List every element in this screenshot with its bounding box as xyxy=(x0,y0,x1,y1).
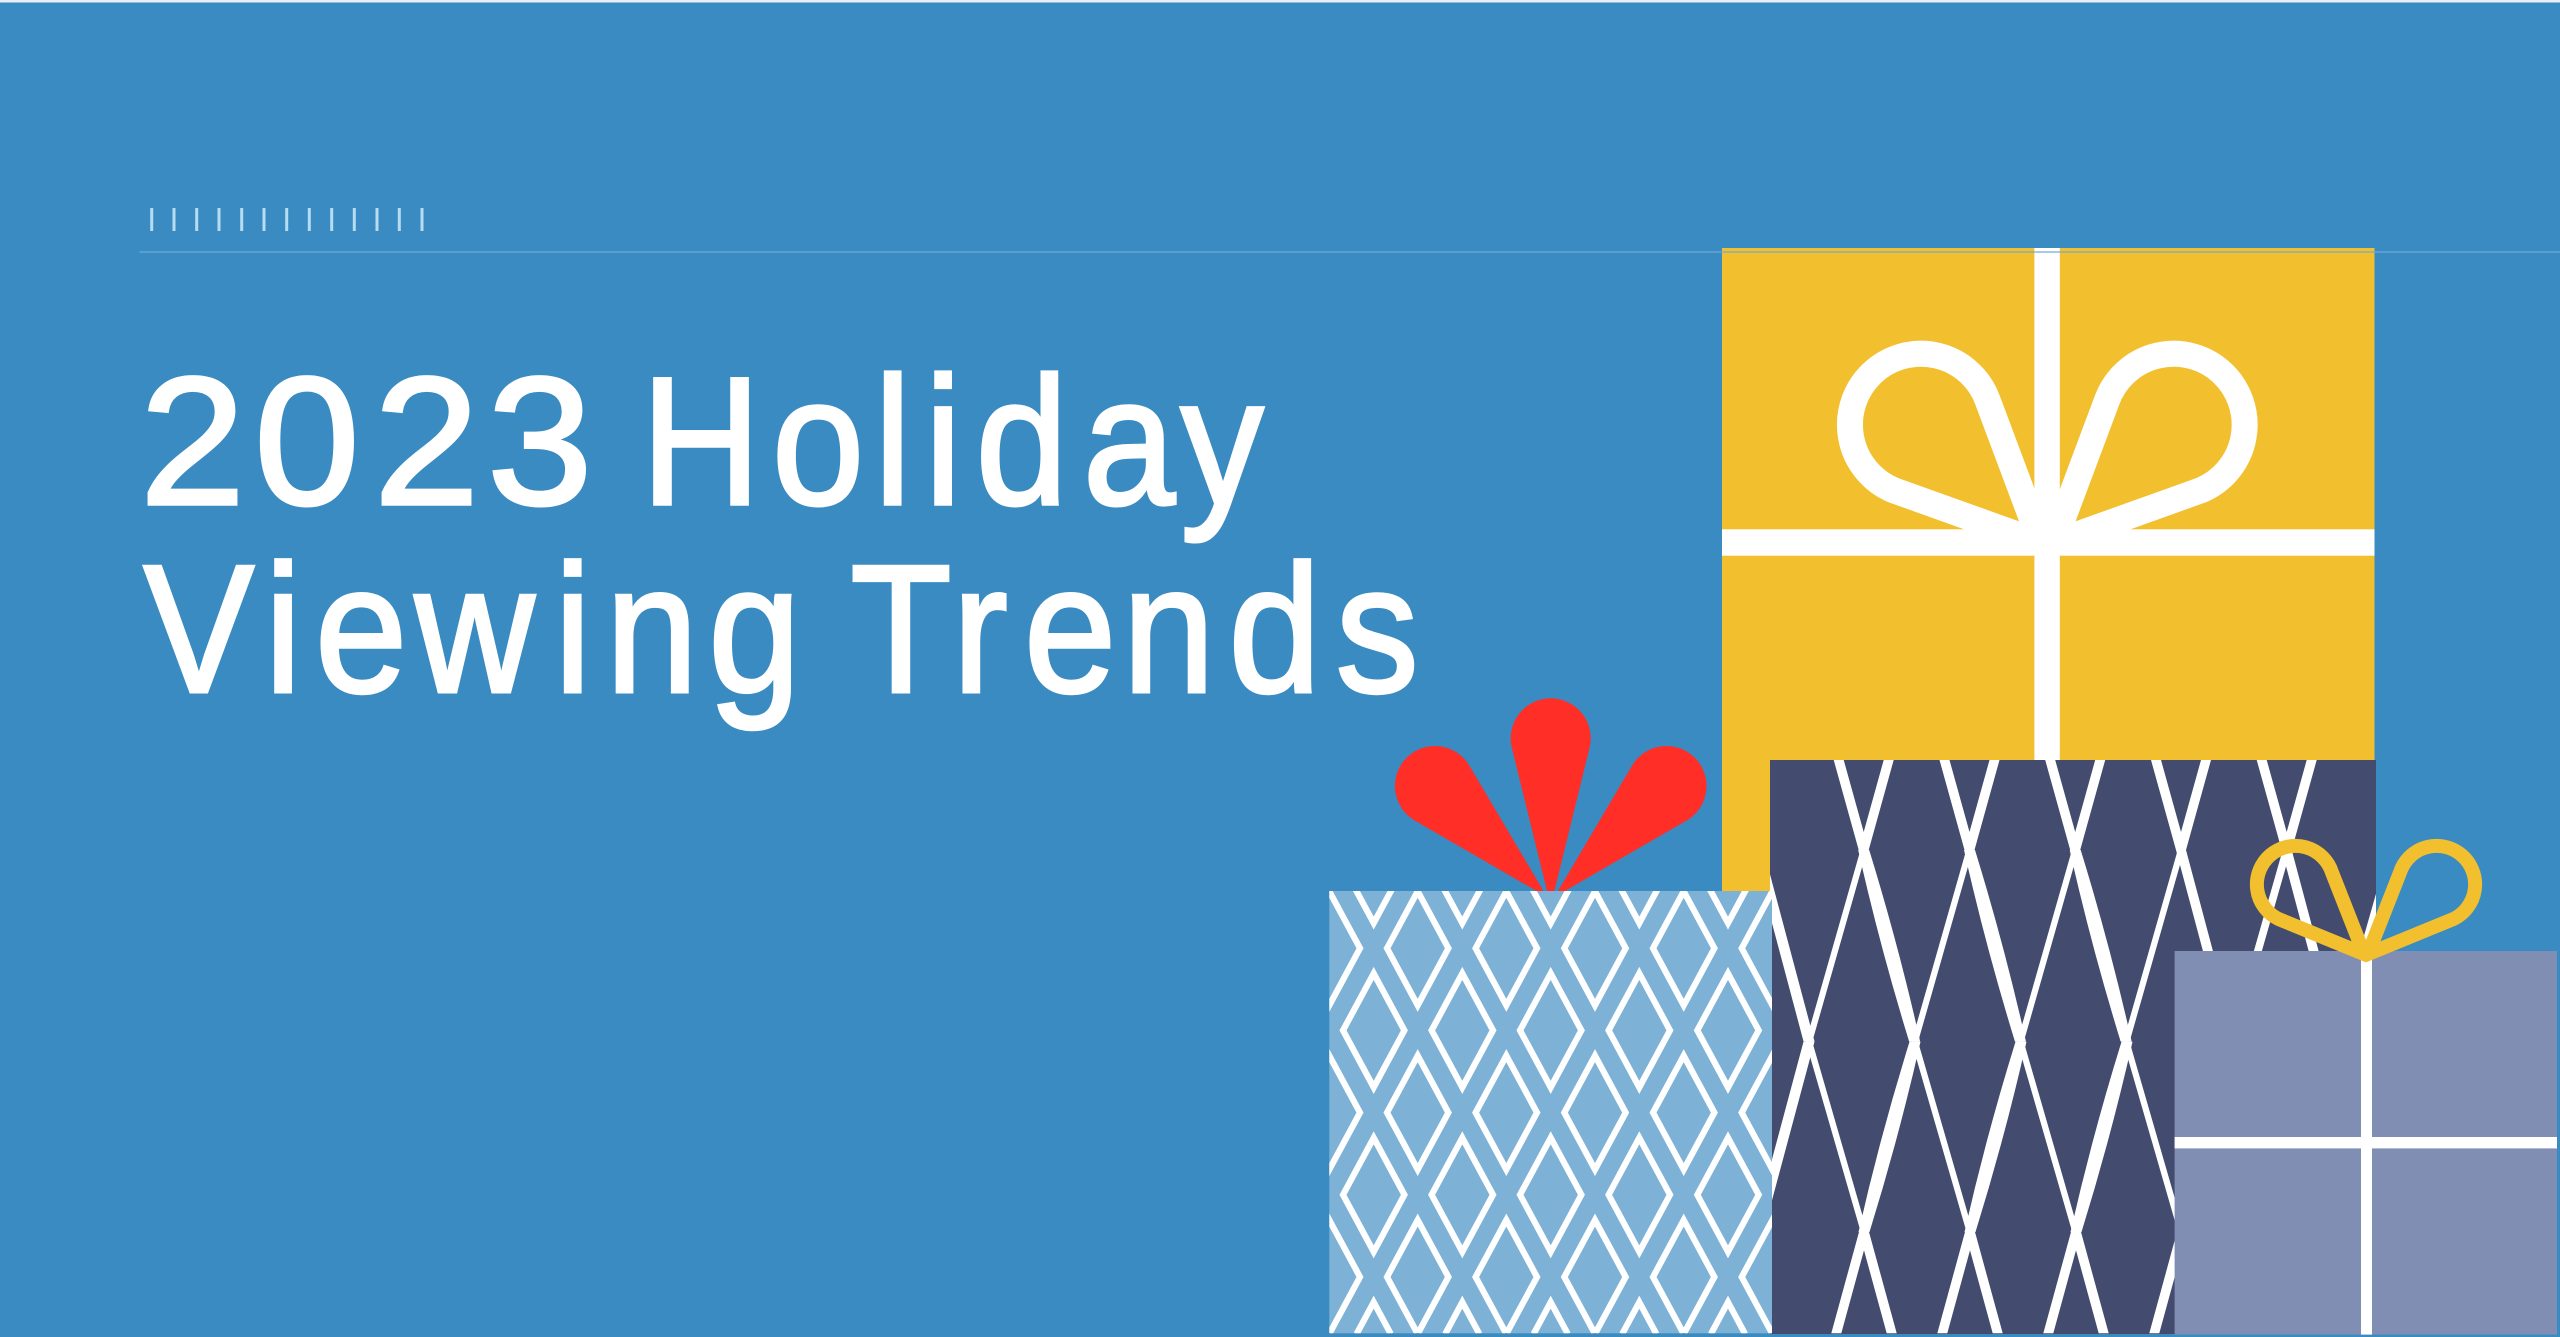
tick marks xyxy=(150,208,423,231)
vertical ribbon xyxy=(2361,951,2372,1335)
vertical ribbon xyxy=(2034,248,2060,768)
horizontal ribbon xyxy=(2175,1137,2557,1148)
title word: Holiday: Holiday xyxy=(641,339,1263,543)
horizontal divider line xyxy=(139,251,2560,253)
top edge strip xyxy=(0,0,2560,2)
navy gift box xyxy=(1752,760,2396,1334)
navy box lattice pattern xyxy=(1752,760,2396,1333)
diamond pattern xyxy=(1329,891,1772,1334)
title line 2: Viewing Trends xyxy=(144,526,1419,730)
navy box body xyxy=(1770,760,2376,1334)
horizontal ribbon xyxy=(1722,529,2374,556)
title year: 2023 xyxy=(140,340,593,543)
light blue box body xyxy=(1329,891,1772,1333)
periwinkle box body xyxy=(2175,951,2557,1335)
yellow gift box xyxy=(1722,248,2374,908)
light blue gift box xyxy=(1329,891,1772,1334)
periwinkle gift box xyxy=(2175,846,2557,1335)
red bow xyxy=(1395,698,1706,891)
title xyxy=(140,339,1419,730)
yellow bow xyxy=(2257,846,2475,954)
yellow box body xyxy=(1722,248,2374,908)
white bow xyxy=(1850,354,2245,543)
